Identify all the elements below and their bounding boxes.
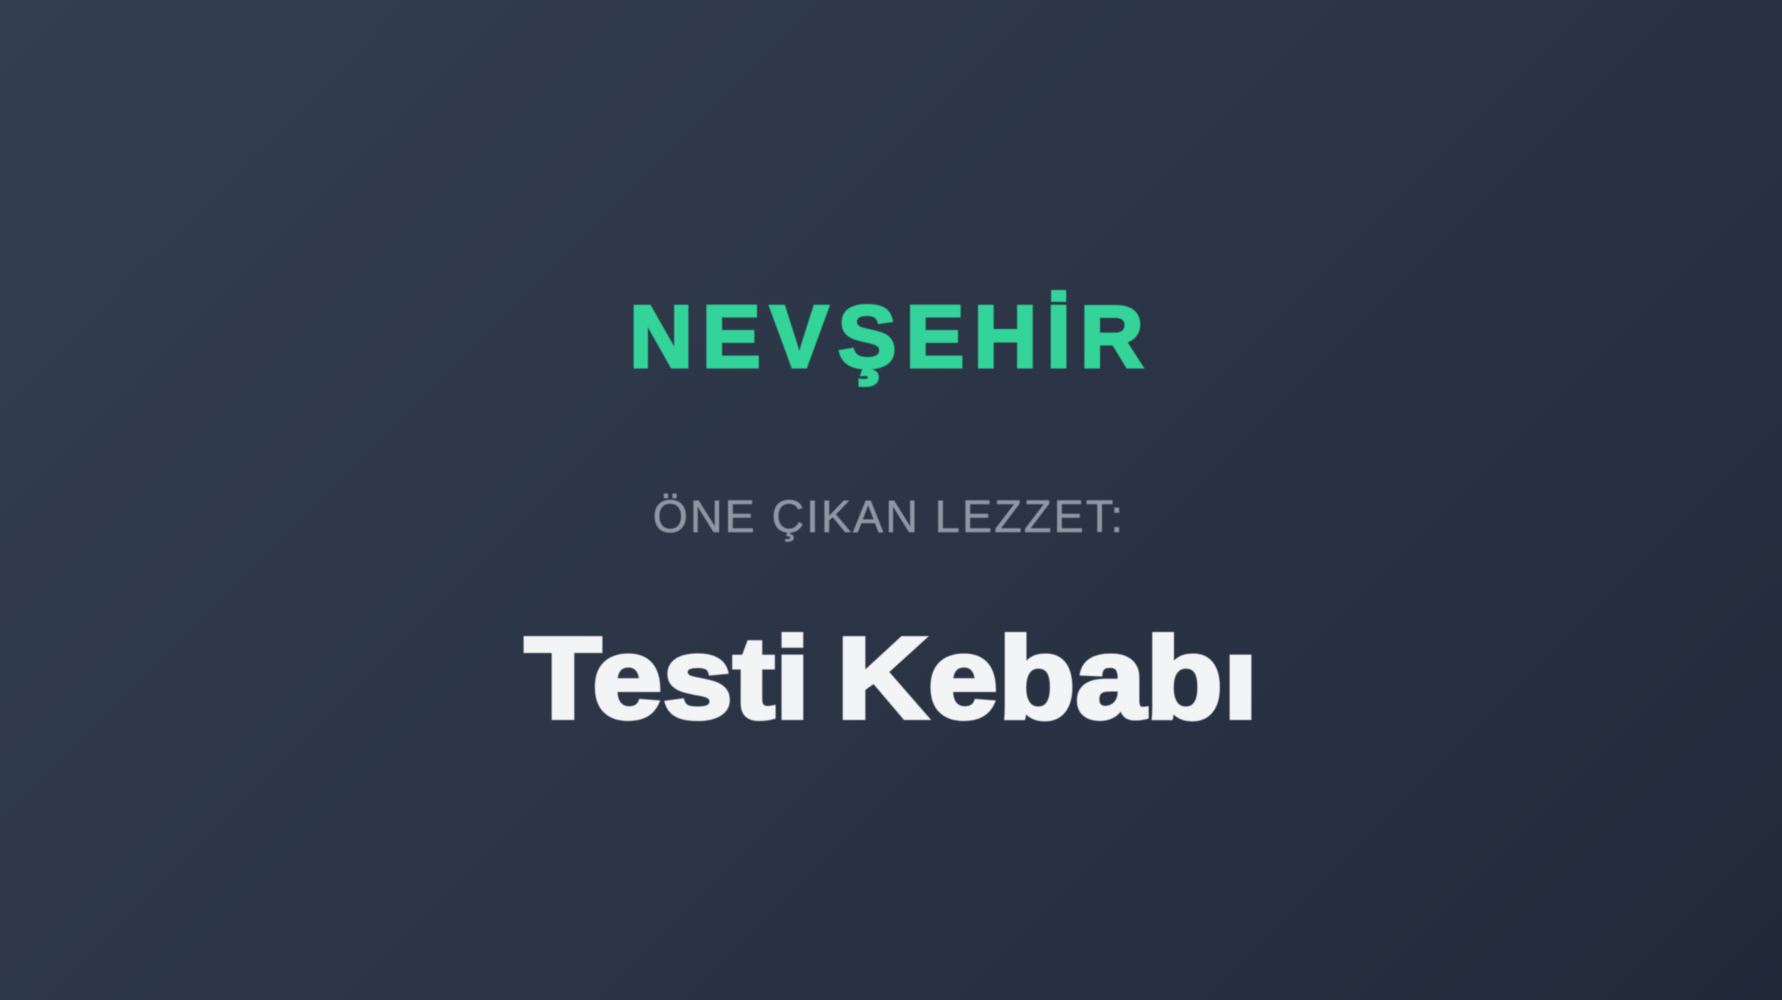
heading: city name: NEVŞEHİR: [629, 287, 1153, 386]
title: dish name: Testi Kebabı: [524, 613, 1258, 743]
text block: featured flavour label: ÖNE ÇIKAN LEZZET:: [653, 491, 1125, 542]
